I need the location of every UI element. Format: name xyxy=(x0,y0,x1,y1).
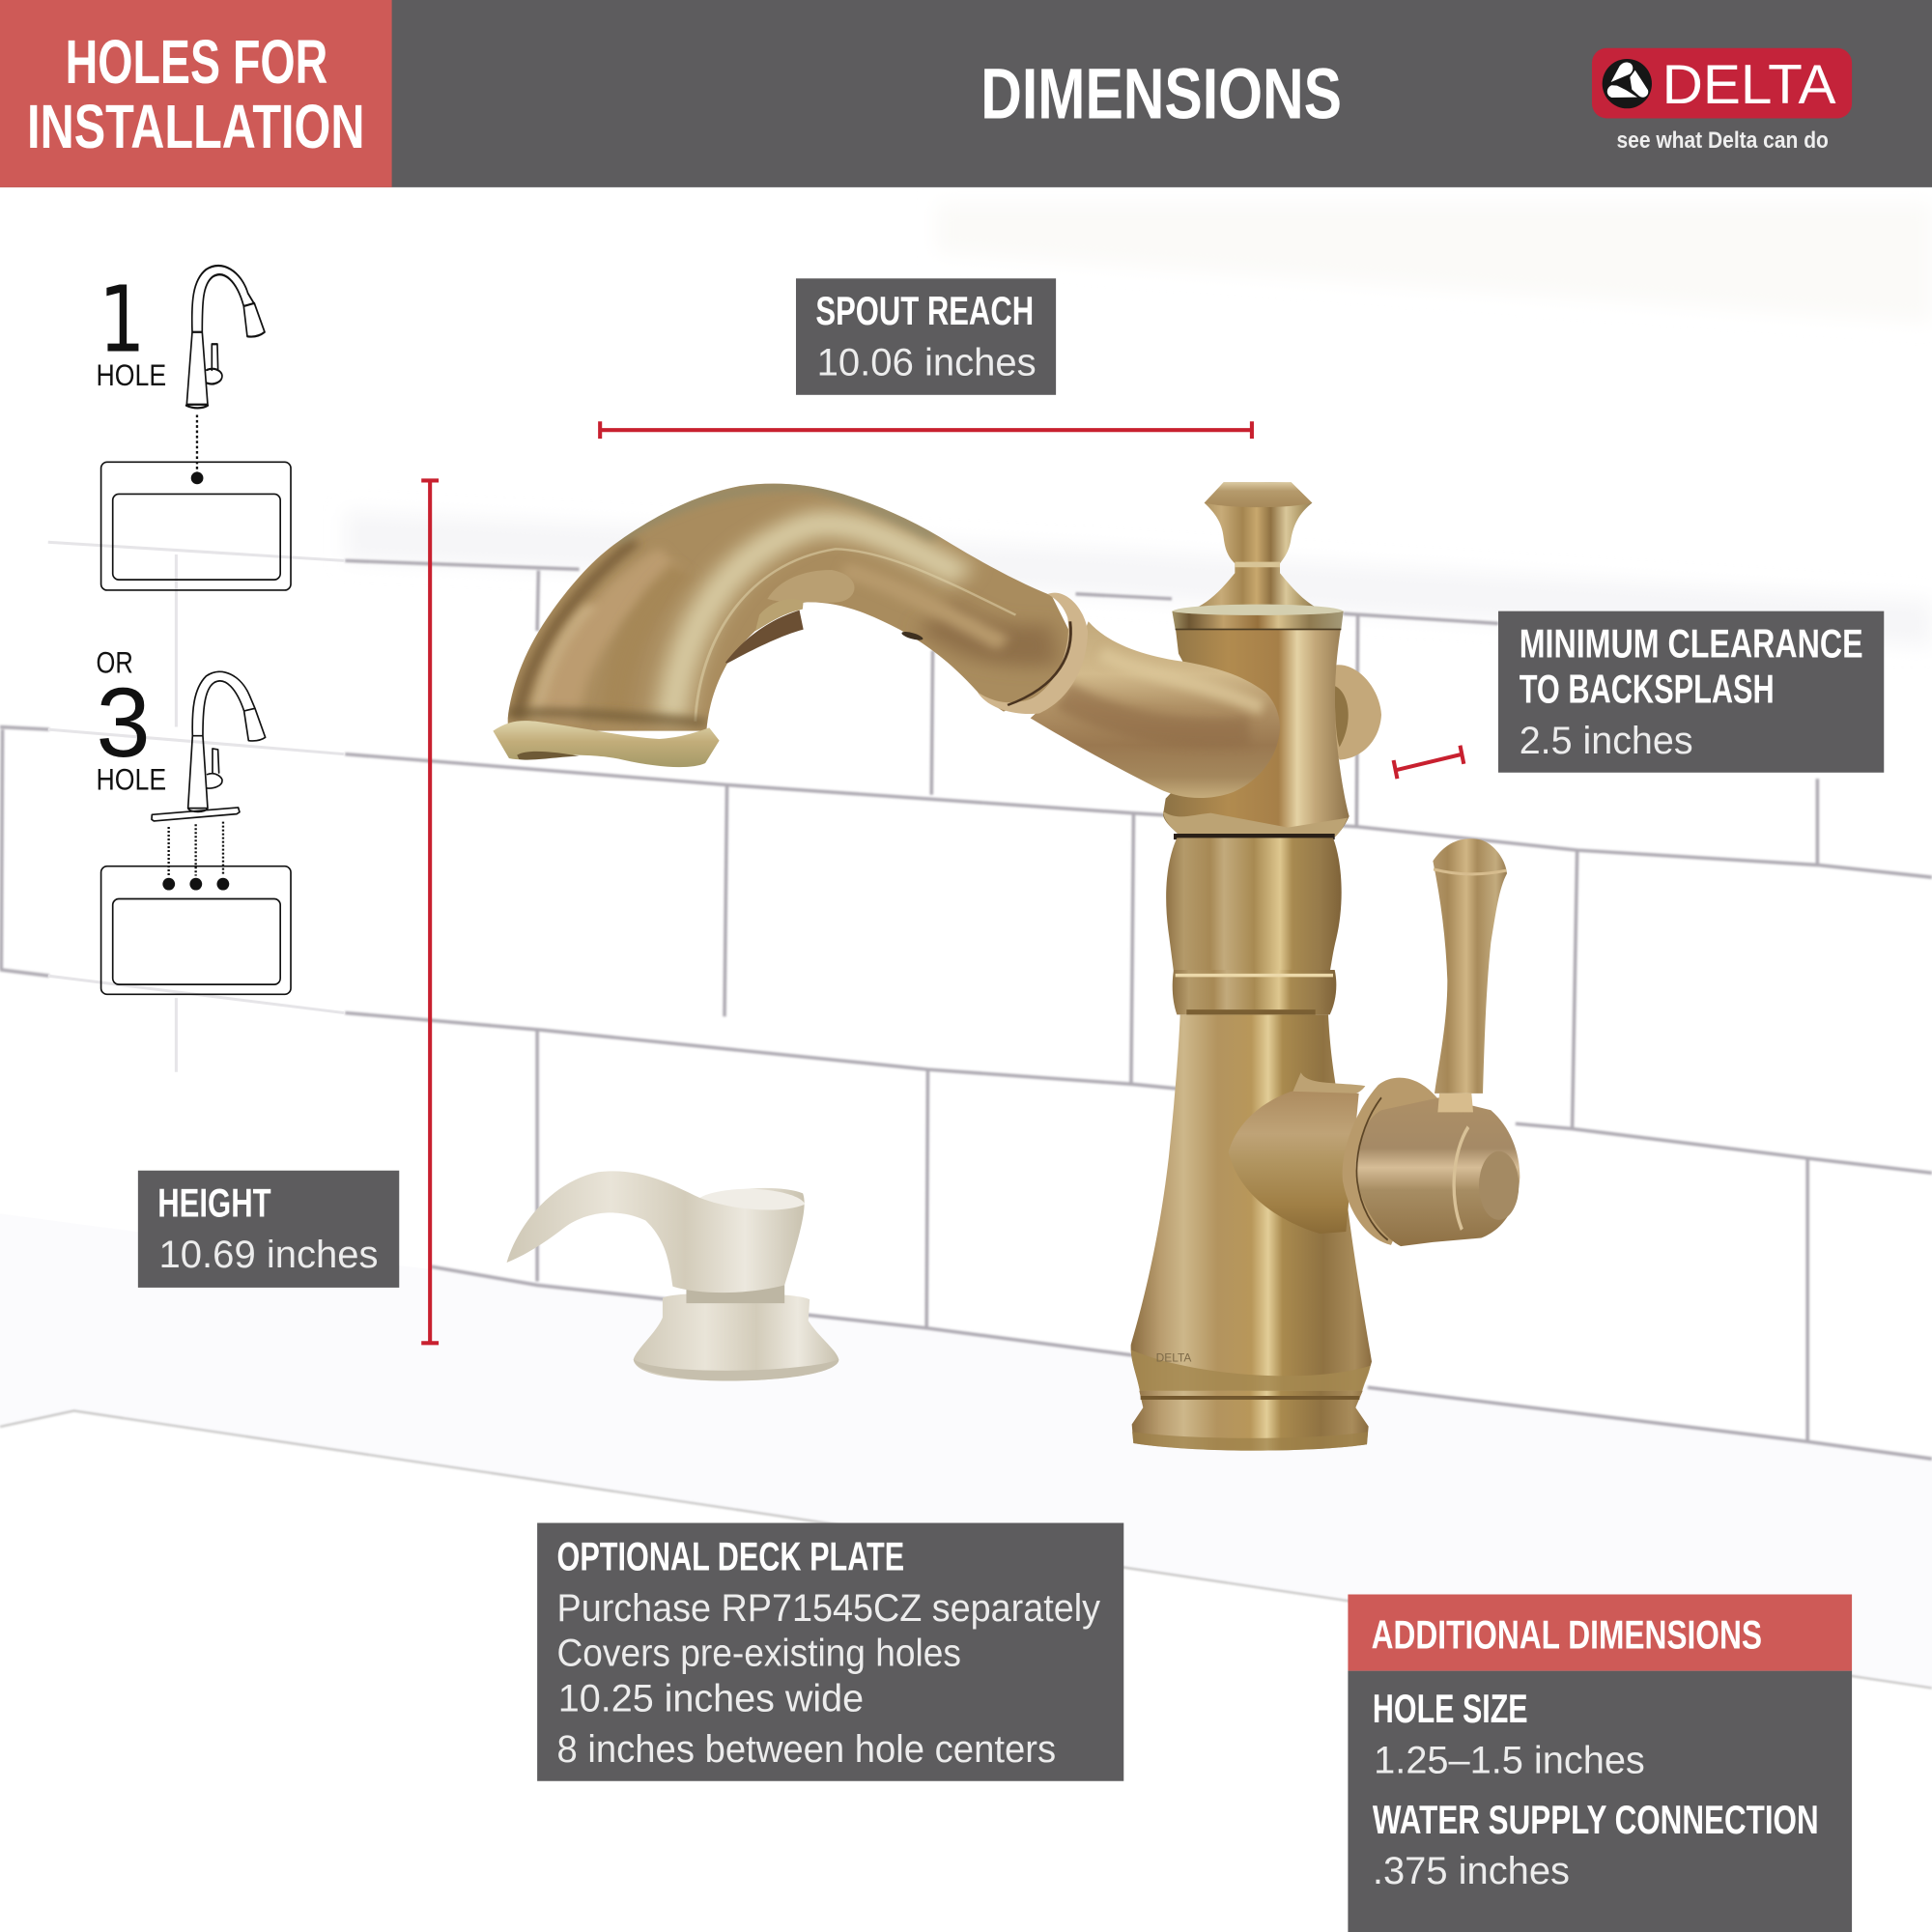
clearance heading line 2: TO BACKSPLASH xyxy=(1520,667,1775,712)
lower ring of upper body xyxy=(1163,811,1348,841)
label: hole: HOLE xyxy=(96,357,166,392)
middle body xyxy=(1166,838,1342,972)
sprayer button xyxy=(767,570,855,603)
upper body xyxy=(1163,626,1350,840)
callout: spout reach xyxy=(796,278,1056,395)
side vent xyxy=(900,630,924,641)
title line 2: INSTALLATION xyxy=(27,92,365,161)
clearance value: 2.5 inches xyxy=(1520,720,1693,762)
additional dimensions header xyxy=(1348,1595,1852,1671)
gap xyxy=(1174,834,1335,839)
faucet lower section xyxy=(1131,834,1520,1451)
callout: minimum clearance xyxy=(1498,611,1884,773)
spout flange xyxy=(493,721,720,767)
label: or: OR xyxy=(96,644,133,679)
lever xyxy=(1433,838,1507,1112)
band xyxy=(1173,970,1336,1014)
callout: optional deck plate xyxy=(537,1523,1123,1781)
icon: faucet on deck plate xyxy=(152,671,266,876)
handle cap xyxy=(1355,1097,1520,1246)
height value: 10.69 inches xyxy=(159,1234,379,1276)
lower body xyxy=(1131,1014,1372,1391)
hub join xyxy=(1292,1072,1365,1099)
spout shading xyxy=(507,487,1056,723)
heading: dimensions: DIMENSIONS xyxy=(980,53,1342,133)
finial xyxy=(1198,482,1316,607)
spout reach heading: SPOUT REACH xyxy=(815,288,1034,333)
clearance dimension line xyxy=(1394,746,1463,779)
height heading: HEIGHT xyxy=(157,1180,271,1226)
spout body xyxy=(508,484,1076,731)
base xyxy=(1132,1391,1369,1451)
deck plate heading: OPTIONAL DECK PLATE xyxy=(557,1534,904,1579)
deck plate line 1: Purchase RP71545CZ separately xyxy=(557,1587,1100,1630)
logo wordmark: DELTA xyxy=(1662,54,1836,116)
deck plate line 2: Covers pre-existing holes xyxy=(557,1632,961,1674)
tagline: see what Delta can do xyxy=(1616,128,1829,154)
sink outline xyxy=(101,462,291,590)
finial rim xyxy=(1205,482,1312,507)
neck to spout xyxy=(1031,621,1280,798)
height dimension line xyxy=(421,480,439,1343)
body mark: DELTA xyxy=(1156,1351,1192,1365)
faucet top section xyxy=(1031,482,1381,841)
header bar xyxy=(0,0,1932,187)
faucet spout xyxy=(493,484,1088,767)
three hole installation diagram xyxy=(96,644,291,994)
dotted connector xyxy=(193,414,200,472)
pull-out collar xyxy=(978,593,1088,714)
logo mark xyxy=(1603,59,1652,108)
neck shading xyxy=(1063,654,1263,732)
numeral 1: 1 xyxy=(99,268,146,374)
additional dimensions heading: ADDITIONAL DIMENSIONS xyxy=(1372,1612,1762,1658)
spout reach value: 10.06 inches xyxy=(817,341,1037,384)
logo: Delta xyxy=(1592,48,1852,154)
deck plate line 4: 8 inches between hole centers xyxy=(557,1728,1056,1771)
hole size value: 1.25–1.5 inches xyxy=(1374,1739,1645,1781)
icon backdrop faint tile lines xyxy=(48,542,344,1072)
title block: holes for installation xyxy=(0,0,392,187)
faucet xyxy=(493,482,1520,1451)
handle hub xyxy=(1229,1092,1359,1234)
callout: additional dimensions xyxy=(1348,1595,1852,1932)
spout reach dimension line xyxy=(600,421,1252,439)
sink outline xyxy=(101,867,291,994)
side button xyxy=(1333,665,1381,760)
soap dispenser xyxy=(507,1171,838,1381)
finial waist xyxy=(1235,562,1280,567)
numeral 3: 3 xyxy=(96,668,151,778)
sprayer underside xyxy=(725,599,804,664)
callout: height xyxy=(138,1171,399,1288)
hole size heading: HOLE SIZE xyxy=(1373,1686,1528,1731)
title line 1: HOLES FOR xyxy=(66,27,327,97)
one hole installation diagram xyxy=(96,266,291,590)
deck plate line 3: 10.25 inches wide xyxy=(558,1678,864,1720)
top disc xyxy=(1172,605,1344,630)
label: hole: HOLE xyxy=(96,762,166,797)
handle ring xyxy=(1343,1078,1449,1245)
water supply value: .375 inches xyxy=(1373,1850,1570,1892)
icon: single hole faucet xyxy=(186,266,265,408)
lower body skirt xyxy=(1131,1350,1371,1392)
